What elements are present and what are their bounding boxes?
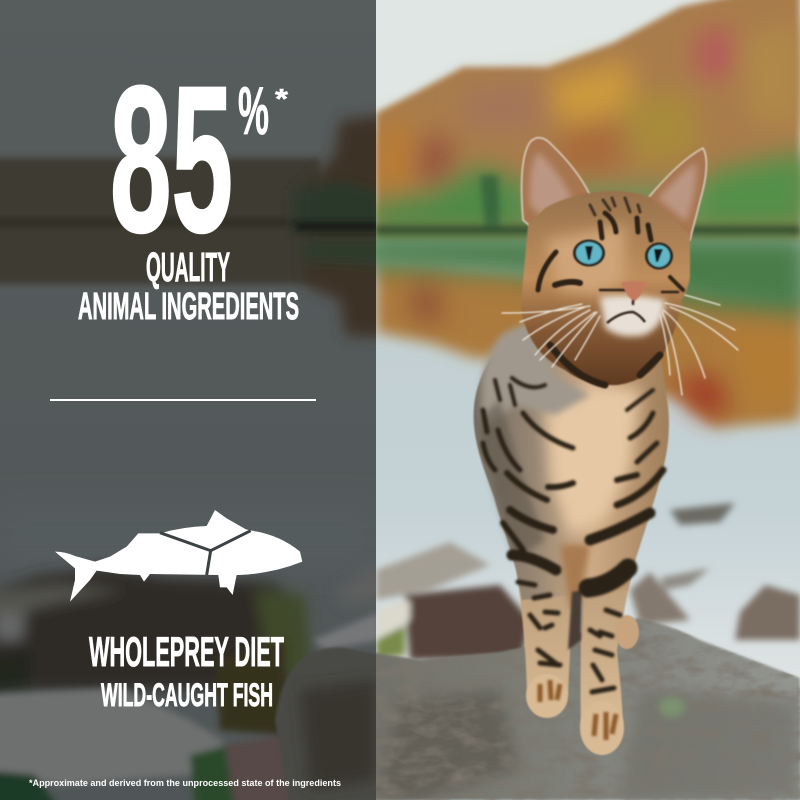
- foreground rock: [376, 618, 800, 800]
- cat muzzle: [600, 295, 665, 336]
- divider line: [50, 399, 316, 401]
- cat body: [474, 330, 669, 600]
- subheading: quality animal ingredients: [78, 244, 299, 328]
- cat grey shoulder: [482, 322, 590, 430]
- background: lake landscape photo: [376, 0, 800, 800]
- cat photo: [474, 138, 738, 755]
- heading: WholePrey diet, wild-caught fish: [89, 628, 284, 713]
- cat head markings: [538, 198, 683, 385]
- cat nose and mouth: [607, 281, 647, 323]
- cat right ear: [648, 148, 706, 240]
- footnote: *Approximate and derived from the unprocessed state of the ingredients: [29, 778, 341, 788]
- sky: [0, 0, 800, 240]
- cat eyes: [573, 240, 673, 270]
- cat belly and legs shading: [560, 545, 590, 610]
- cat legs: [517, 555, 635, 725]
- cat left ear: [522, 138, 590, 235]
- headline stat: 85%*: 85: [110, 44, 233, 276]
- shoreline rocks on panel: [0, 558, 385, 695]
- headline stat: 85%*: *: [275, 83, 288, 114]
- back paw: [615, 615, 639, 649]
- cat flank shadow: [478, 400, 545, 560]
- front paws: [526, 674, 624, 755]
- cat chest: [545, 385, 640, 535]
- water reflection: [376, 262, 800, 427]
- cat body stripes: [483, 378, 663, 692]
- heading: WholePrey diet, wild-caught fish: WILD-CAUGHT FISH: [101, 677, 273, 713]
- far shore: autumn treeline: [376, 0, 800, 240]
- subheading: quality animal ingredients: ANIMAL INGREDIENTS: [78, 286, 299, 328]
- cat whiskers: [502, 295, 738, 395]
- far rocks: [376, 503, 800, 660]
- cat cheek and brow highlights: [545, 225, 625, 295]
- cat head: [521, 191, 690, 385]
- subheading: quality animal ingredients: QUALITY: [146, 244, 230, 290]
- heading: WholePrey diet, wild-caught fish: WHOLEPREY DIET: [89, 628, 284, 675]
- dark translucent left panel: [0, 0, 390, 800]
- water: [376, 330, 800, 690]
- headline stat: 85%*: %: [238, 73, 269, 149]
- icon: fish: [55, 510, 302, 602]
